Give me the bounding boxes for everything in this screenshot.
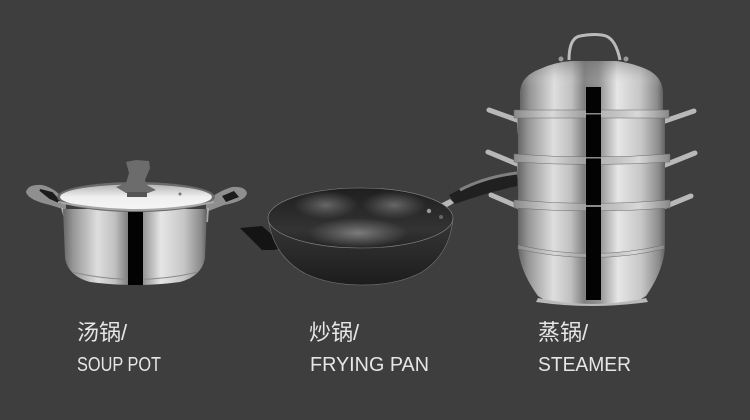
label: frying pan: FRYING PAN: [310, 354, 429, 376]
steamer lid shading: [520, 61, 663, 112]
soup pot lid knob: [116, 160, 156, 197]
label: soup pot: 汤锅/: [77, 320, 128, 345]
soup pot black stripe: [128, 210, 143, 285]
label: frying pan: 炒锅/: [309, 320, 360, 345]
soup pot lid: [57, 182, 215, 212]
steamer lid handle: [558, 34, 628, 62]
steamer base: [536, 298, 648, 306]
steamer: [488, 34, 695, 306]
steamer stripe rim lines: [586, 113, 601, 207]
soup pot lid vent: [178, 192, 182, 196]
pan inner rim: [268, 188, 453, 248]
pan long handle: [436, 173, 517, 210]
pan outer body: [268, 216, 453, 285]
label: soup pot: [77, 320, 161, 376]
label: frying pan: [309, 320, 429, 376]
label: steamer: 蒸锅/: [538, 320, 589, 345]
pan short handle: [240, 226, 295, 256]
soup pot lower groove: [72, 272, 198, 280]
label: soup pot: SOUP POT: [77, 354, 161, 376]
steamer handle brackets: [518, 118, 664, 222]
frying pan: [240, 173, 517, 285]
soup pot right handle: [206, 187, 247, 222]
steamer black stripe: [586, 87, 601, 300]
label: steamer: STEAMER: [538, 354, 631, 376]
label: steamer: [538, 320, 631, 376]
soup pot body: [63, 209, 207, 285]
soup pot: [26, 160, 247, 285]
steamer rims: [514, 110, 670, 258]
soup pot left handle: [26, 185, 66, 222]
pan highlights: [294, 191, 426, 248]
pan rivets: [427, 209, 443, 219]
steamer side handles: [488, 110, 695, 207]
steamer lid: [520, 61, 663, 112]
steamer tiers: [518, 113, 665, 305]
